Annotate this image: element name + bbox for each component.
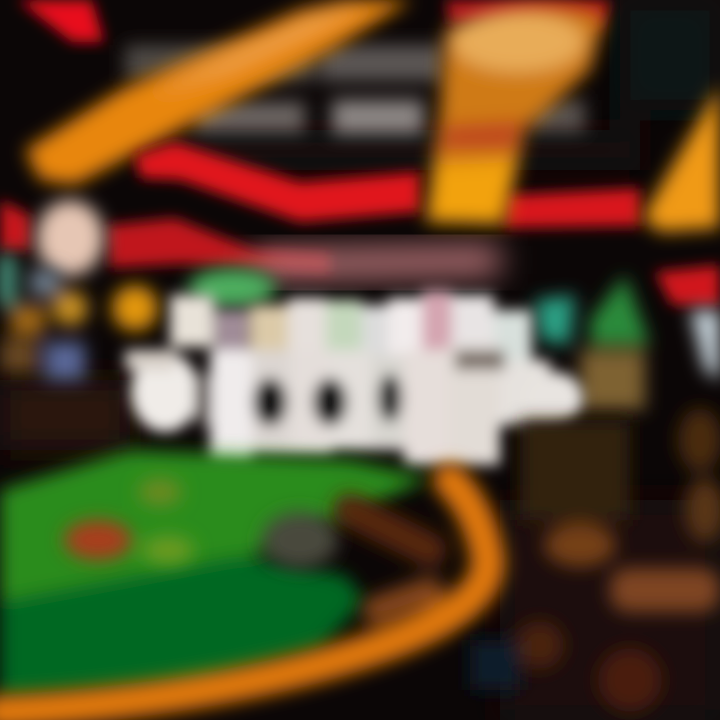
pale figure head xyxy=(36,200,104,276)
green felt table xyxy=(0,450,430,700)
pink band above the cards xyxy=(250,245,500,280)
row of white cards xyxy=(125,290,583,465)
orange curved table rim xyxy=(0,480,488,712)
dark pips xyxy=(253,378,287,426)
orange cone tower xyxy=(425,5,605,225)
orange right beam xyxy=(642,85,720,232)
upper card faces xyxy=(170,295,214,347)
brown seats on the right xyxy=(470,408,720,712)
red ceiling patch xyxy=(18,0,612,42)
red wavy band xyxy=(0,142,720,305)
lower card faces xyxy=(131,352,199,432)
left colored chips xyxy=(0,255,158,380)
grey blurred sign text xyxy=(125,45,585,134)
orange diagonal beam xyxy=(25,0,412,185)
felt markers xyxy=(64,478,338,568)
green banner above the cards xyxy=(188,268,720,410)
